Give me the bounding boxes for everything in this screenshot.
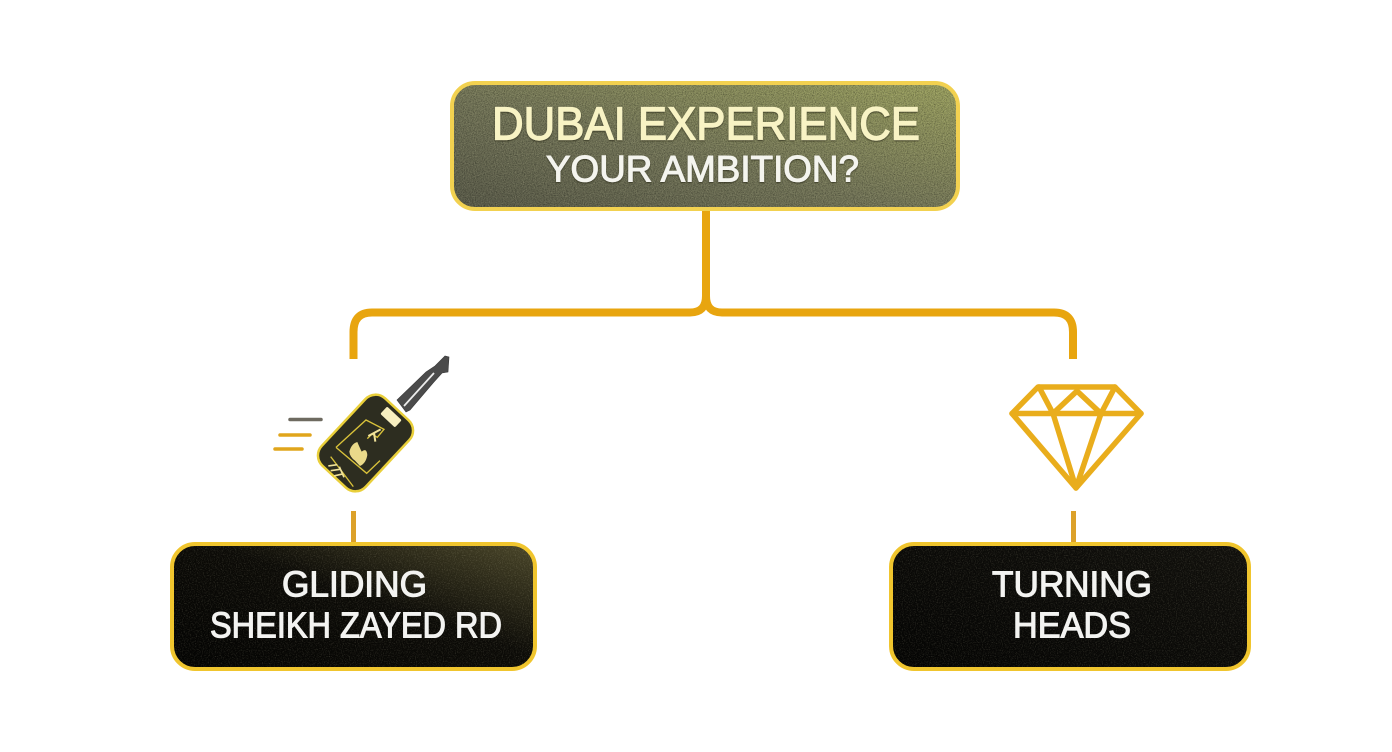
subheading: YOUR AMBITION?	[546, 148, 859, 190]
speed lines	[275, 420, 321, 449]
fob emblem	[328, 420, 384, 487]
panel: right option	[891, 544, 1249, 669]
panel: left option	[172, 544, 535, 669]
connector: stem and branches	[354, 210, 1073, 359]
connector: right stub	[1071, 511, 1076, 543]
label: GLIDING	[282, 564, 427, 604]
icon: diamond	[1012, 387, 1141, 488]
fob button	[380, 407, 402, 427]
icon: car key	[275, 356, 449, 497]
connector: left stub	[351, 511, 356, 543]
panel: top question	[452, 83, 958, 209]
key blade	[397, 356, 449, 412]
key fob	[312, 389, 419, 497]
panel: left option: SHEIKH ZAYED RD	[210, 604, 502, 646]
panel: right option: HEADS	[1013, 604, 1131, 646]
heading: DUBAI EXPERIENCE	[492, 98, 920, 150]
label: TURNING	[992, 564, 1152, 604]
